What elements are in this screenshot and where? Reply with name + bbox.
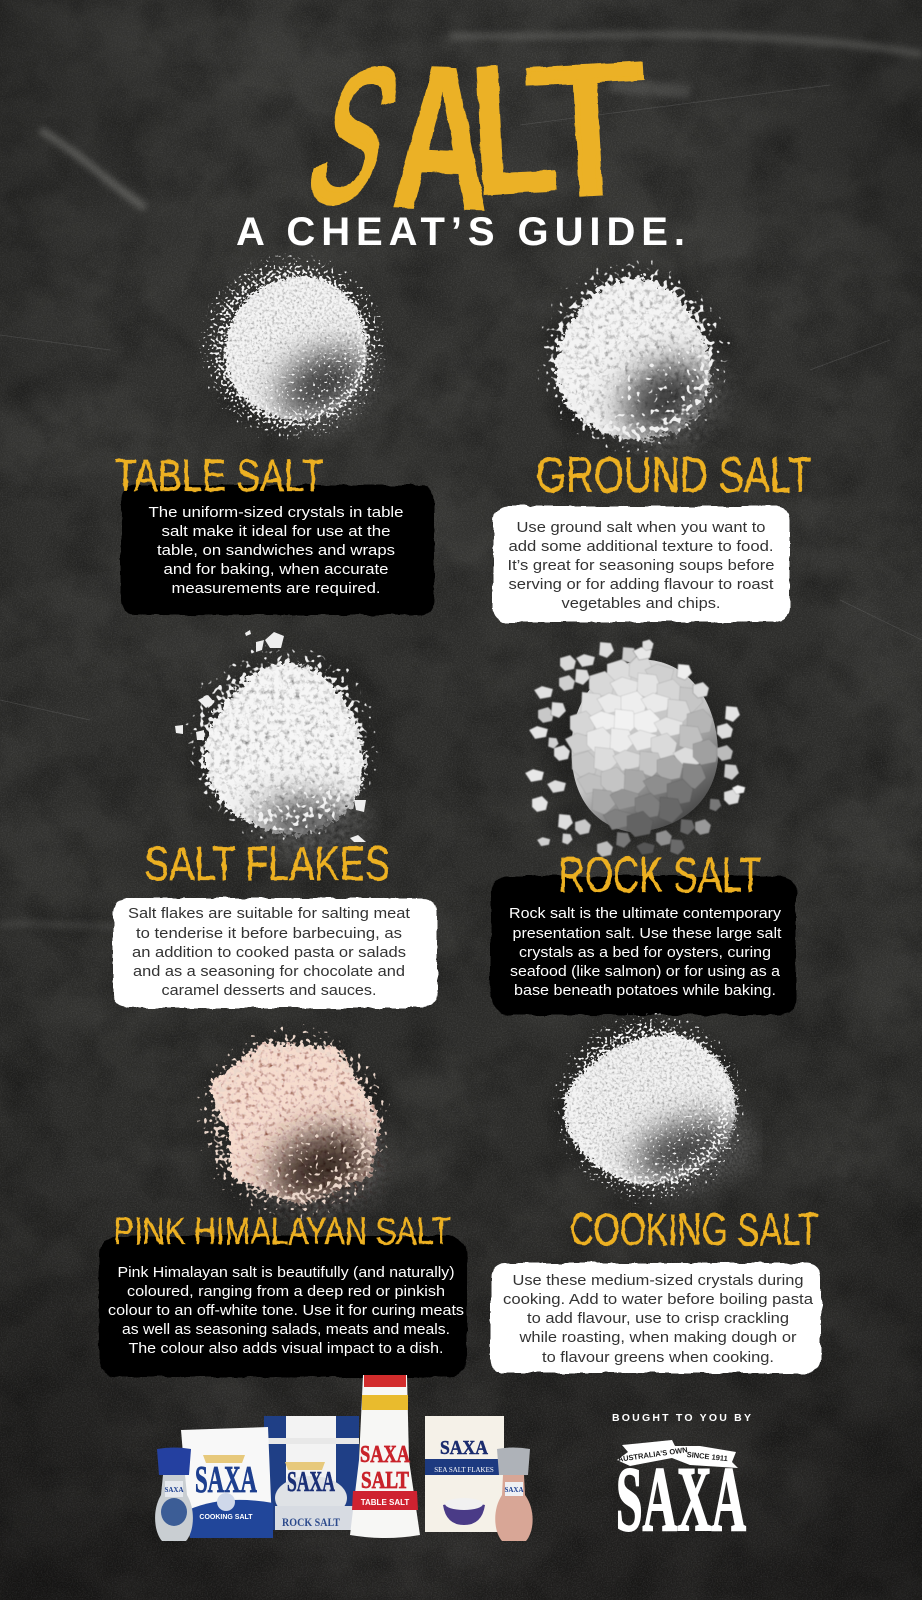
panel text [508,519,774,612]
products: pink grinder [495,1448,533,1541]
heading: rock salt: ROCK SALT [558,847,762,903]
panel background [113,898,437,1008]
products: rock salt bag: SAXA [287,1466,335,1498]
products: rock salt bag [264,1416,359,1530]
logo: SAXA [616,1440,746,1550]
panel text [148,504,404,597]
panel text: table, on sandwiches and wraps [157,542,395,559]
panel text: and as a seasoning for chocolate and [133,963,405,980]
panel text: salt make it ideal for use at the [162,523,390,540]
heading: pink himalayan salt: PINK HIMALAYAN SALT [114,1211,450,1253]
panel background [99,1236,467,1377]
panel: rock salt [491,876,796,1015]
panel: ground salt [493,506,790,622]
panel: pink himalayan salt [99,1236,467,1377]
panel text: while roasting, when making dough or [518,1329,796,1346]
title: SALT [287,22,654,254]
panel text: The colour also adds visual impact to a dish. [128,1340,444,1357]
panel text: add some additional texture to food. [508,538,774,555]
panel text: The uniform-sized crystals in table [148,504,404,521]
letter S: S [287,30,422,242]
rock crystals: scattered [525,639,745,857]
salt pile: rock salt [525,632,763,868]
rock crystals: inner pile [565,655,719,837]
panel text: colour to an off-white tone. Use it for curing meats [108,1302,464,1319]
products: blue grinder [155,1448,193,1541]
flake crumbs [175,630,366,842]
panel text: coloured, ranging from a deep red or pinkish [127,1283,445,1300]
panel text: vegetables and chips. [562,595,720,612]
salt pile: pink himalayan salt [184,1016,408,1240]
panel text: to tenderise it before barbecuing, as [136,925,402,942]
logo banner text: AUSTRALIA’S OWN [617,1445,688,1464]
products: cooking salt bag: SAXA [195,1459,257,1501]
panel text [509,905,782,999]
panel text: and for baking, when accurate [164,561,388,578]
panel text: cooking. Add to water before boiling pasta [503,1291,814,1308]
panel background [493,506,790,622]
products: table salt shaker: SAXA [360,1442,411,1468]
salt pile: table salt [195,249,395,450]
logo banner [617,1440,738,1468]
letter L: L [465,24,563,234]
panel text: crystals as a bed for oysters, curing [519,944,771,961]
panel: table salt [121,485,434,615]
panel text [128,905,411,999]
panel text: measurements are required. [172,580,380,597]
heading: table salt: TABLE SALT [114,450,324,501]
panel text: presentation salt. Use these large salt [512,925,782,942]
panel text: to flavour greens when cooking. [542,1349,774,1366]
products: cooking salt bag [181,1427,273,1538]
panel text [503,1272,814,1366]
salt pile: ground salt [530,256,740,467]
panel text: Salt flakes are suitable for salting meat [128,905,411,922]
panel: cooking salt [491,1263,821,1373]
logo: SAXA: SINCE 1911 [686,1450,728,1463]
panel background [491,1263,821,1373]
products: pink grinder: SAXA [504,1486,524,1494]
heading: ground salt: GROUND SALT [536,447,812,503]
panel: salt flakes [113,898,437,1008]
products: rock salt bag: ROCK SALT [282,1515,340,1529]
products: table salt shaker: TABLE SALT [361,1498,409,1507]
letter T: T [521,24,654,236]
salt pile: cooking salt [544,1007,760,1223]
panel background [491,876,796,1015]
panel text: caramel desserts and sauces. [162,982,376,999]
panel text [108,1264,464,1357]
panel text: to add flavour, use to crisp crackling [527,1310,789,1327]
products: sea salt flakes box: SEA SALT FLAKES [434,1466,494,1474]
products: cooking salt bag: COOKING SALT [199,1514,253,1521]
panel text: Rock salt is the ultimate contemporary [509,905,782,922]
subtitle: A CHEAT’S GUIDE. [236,210,685,254]
products: table salt shaker [350,1375,420,1538]
products: sea salt flakes box [425,1416,504,1532]
heading: cooking salt: COOKING SALT [570,1204,818,1255]
heading: salt flakes: SALT FLAKES [144,838,390,891]
panel text: It’s great for seasoning soups before [508,557,774,574]
panel text: an addition to cooked pasta or salads [132,944,406,961]
salt pile: salt flakes [173,630,397,862]
panel text: seafood (like salmon) or for using as a [510,963,781,980]
letter A: A [388,22,495,254]
panel text: base beneath potatoes while baking. [514,982,776,999]
products: blue grinder: SAXA [164,1486,184,1494]
panel text: Use ground salt when you want to [516,519,766,536]
panel text: serving or for adding flavour to roast [508,576,774,593]
panel background [121,485,434,615]
products: table salt shaker: SALT [361,1468,409,1494]
panel text: Use these medium-sized crystals during [512,1272,804,1289]
sponsor label: BOUGHT TO YOU BY [612,1412,751,1424]
panel text: as well as seasoning salads, meats and meals. [122,1321,450,1338]
panel text: Pink Himalayan salt is beautifully (and naturally) [118,1264,454,1281]
logo wordmark: SAXA [616,1448,746,1550]
products: sea salt flakes box: SAXA [440,1437,488,1459]
